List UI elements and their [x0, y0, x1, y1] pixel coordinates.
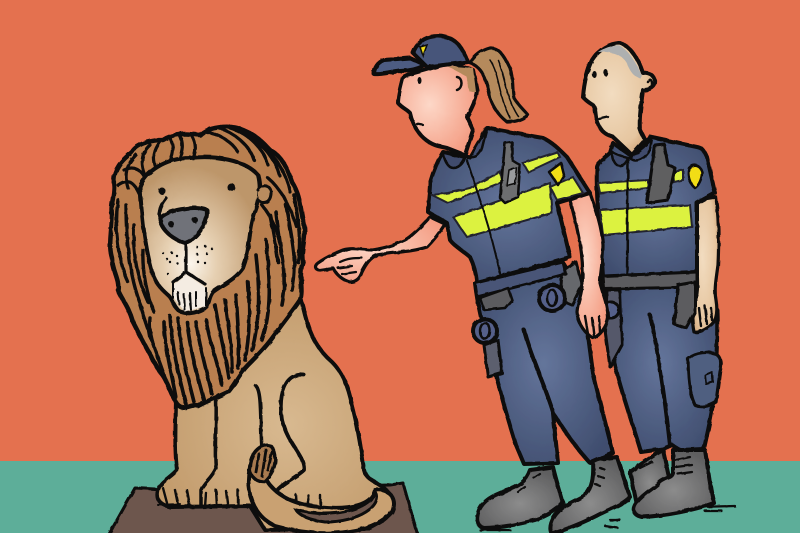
man eyes and mouth — [592, 70, 608, 119]
officer right: male police officer — [583, 43, 735, 517]
man boot laces and shadows — [640, 457, 735, 511]
man cargo pocket — [688, 352, 721, 407]
lion face — [140, 157, 260, 313]
man right arm and hand — [692, 197, 719, 332]
woman belt — [475, 262, 566, 297]
woman handcuff pouch on belt — [539, 262, 582, 311]
woman boot laces and shadows — [480, 468, 620, 530]
woman ponytail — [470, 48, 528, 122]
man near boot — [634, 450, 714, 517]
lion nose — [160, 208, 207, 243]
woman right boot — [550, 457, 630, 533]
lion muzzle and whisker dots — [159, 198, 213, 312]
lion pedestal — [108, 483, 418, 533]
lion legs and haunch lines — [158, 375, 320, 510]
woman left boot — [477, 467, 563, 528]
woman eye, ear, mouth — [417, 77, 462, 125]
woman reflective stripes — [432, 152, 583, 237]
man badge — [688, 165, 702, 188]
lion ear — [258, 186, 271, 202]
woman badge — [549, 163, 564, 185]
lion statue — [108, 127, 418, 533]
lion tail — [248, 445, 394, 533]
woman shirt — [428, 128, 590, 283]
lion mane strands — [116, 128, 300, 404]
woman hair patch — [447, 66, 476, 92]
man grey hair — [598, 46, 642, 78]
lion eyes — [158, 183, 235, 194]
woman pointing arm and hand — [316, 217, 445, 282]
woman hanging arm and hand — [570, 193, 608, 338]
woman cap crown — [413, 36, 468, 67]
man head — [583, 43, 655, 155]
background: teal floor — [0, 461, 800, 533]
woman radio — [500, 142, 520, 203]
woman cap visor — [374, 58, 425, 74]
man far boot — [630, 450, 670, 505]
man holster — [605, 290, 622, 367]
lion body — [157, 295, 393, 530]
man belt — [603, 272, 697, 289]
man reflective stripes — [598, 170, 692, 235]
man radio — [647, 144, 675, 203]
man trousers — [603, 273, 717, 452]
officer left: female police officer — [316, 36, 630, 533]
woman left pouch and cuffs — [473, 319, 502, 377]
woman shirt seam and collar — [443, 128, 502, 282]
lion mane — [110, 127, 305, 408]
woman head — [398, 63, 477, 155]
woman cap badge — [420, 45, 427, 56]
woman trousers — [475, 263, 613, 464]
man shirt — [597, 137, 715, 277]
man shirt seam and collar — [612, 138, 652, 275]
